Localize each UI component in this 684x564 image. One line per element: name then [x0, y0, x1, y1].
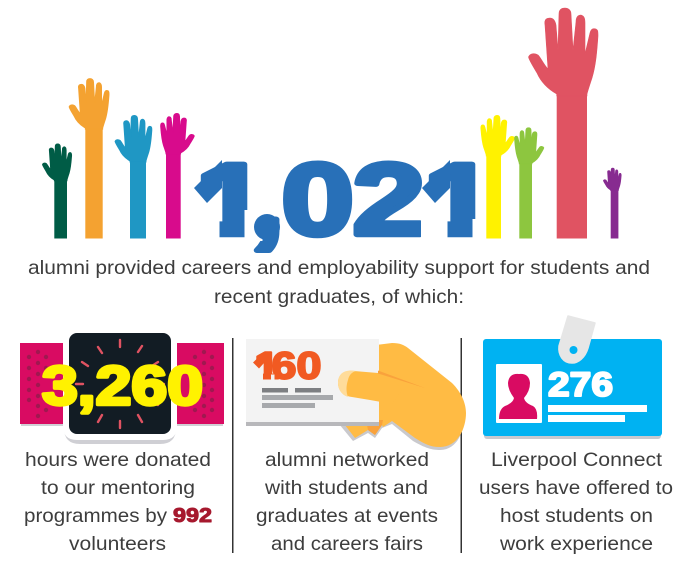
text: Liverpool Connect: work experience — [499, 533, 653, 555]
text: Liverpool Connect — [479, 449, 673, 555]
text: Liverpool Connect: Liverpool Connect — [491, 449, 663, 471]
badge number: 276 — [548, 366, 613, 404]
raised hand: red — [528, 8, 598, 238]
text: Liverpool Connect: users have offered to — [479, 477, 673, 499]
text: alumni networked — [256, 449, 438, 555]
icon: hand holding card — [246, 339, 466, 450]
text: hours donated: programmes by — [24, 505, 167, 527]
raised hand: green — [515, 128, 544, 238]
text: alumni networked: graduates at events — [256, 505, 438, 527]
raised hand: purple — [603, 168, 621, 238]
divider left — [232, 338, 234, 553]
raised hand: dark green — [42, 144, 72, 238]
text: alumni networked: alumni networked — [265, 449, 429, 471]
raised hand: orange — [69, 79, 109, 238]
text: hours donated: volunteers — [69, 533, 166, 555]
headline number: 1,021 — [195, 142, 496, 256]
intro text: alumni provided careers and employability support for students and — [28, 257, 650, 279]
icon: watch — [20, 330, 224, 444]
card number: 160 — [254, 344, 321, 387]
divider right — [460, 338, 462, 553]
raised hand: yellow — [481, 115, 515, 238]
volunteers figure: 992 — [173, 505, 212, 527]
text: alumni networked: and careers fairs — [271, 533, 423, 555]
intro text — [28, 257, 650, 308]
text: hours donated — [24, 449, 212, 555]
text: Liverpool Connect: host students on — [500, 505, 653, 527]
watch number: 3,260 — [42, 354, 203, 416]
icon: ID badge — [483, 316, 662, 439]
raised hand: magenta — [161, 113, 194, 238]
text: hours donated: hours were donated — [25, 449, 211, 471]
intro text: recent graduates, of which: — [214, 286, 464, 308]
text: hours donated: to our mentoring — [41, 477, 195, 499]
raised hand: blue — [115, 115, 152, 238]
text: alumni networked: with students and — [264, 477, 428, 499]
